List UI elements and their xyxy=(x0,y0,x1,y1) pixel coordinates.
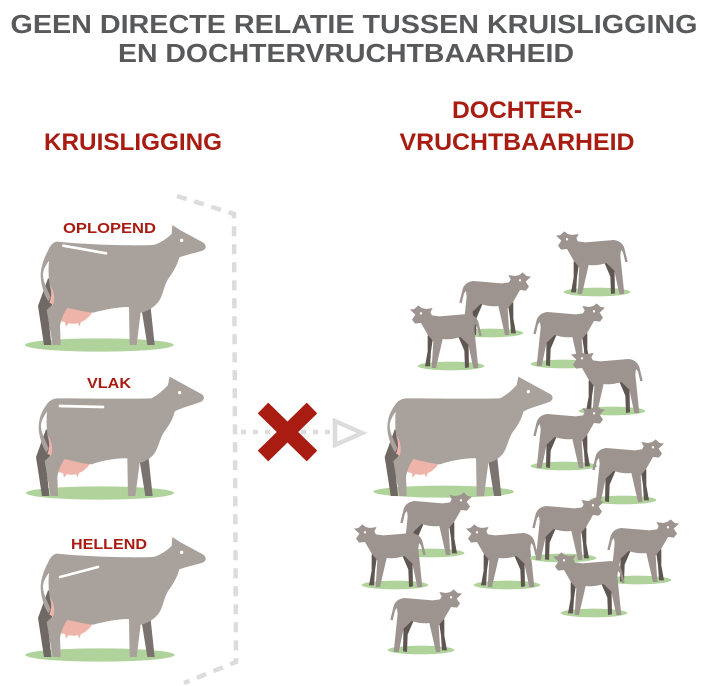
label: hellend: HELLEND xyxy=(71,536,147,553)
cow: vlak xyxy=(26,377,204,500)
calf 1 xyxy=(556,231,630,296)
cow: oplopend xyxy=(25,225,206,352)
mother cow xyxy=(373,377,553,498)
title xyxy=(10,9,697,68)
calf 4 xyxy=(531,303,605,368)
red cross xyxy=(263,408,312,456)
calf 7 xyxy=(590,439,664,504)
dashed bracket xyxy=(177,196,236,683)
calf 11 xyxy=(530,497,604,562)
heading: dochtervruchtbaarheid: VRUCHTBAARHEID xyxy=(400,129,634,156)
label: vlak: VLAK xyxy=(87,375,131,392)
calf 6 xyxy=(531,405,605,470)
calf 14 xyxy=(388,589,462,654)
heading: dochtervruchtbaarheid xyxy=(400,97,634,156)
calf 10 xyxy=(466,524,540,589)
arrow xyxy=(241,421,362,445)
calf 12 xyxy=(605,519,679,584)
calf 3 xyxy=(410,305,484,370)
calf 5 xyxy=(571,350,645,415)
heading: kruisligging: KRUISLIGGING xyxy=(44,129,222,156)
label: oplopend: OPLOPEND xyxy=(63,220,156,237)
calf 13 xyxy=(553,552,627,617)
calf 2 xyxy=(457,272,531,337)
heading: dochtervruchtbaarheid: DOCHTER- xyxy=(452,97,582,124)
title: EN DOCHTERVRUCHTBAARHEID xyxy=(118,38,574,68)
cow: hellend xyxy=(25,537,206,662)
calf 8 xyxy=(398,492,472,557)
calf 9 xyxy=(354,524,428,589)
title: GEEN DIRECTE RELATIE TUSSEN KRUISLIGGING xyxy=(10,9,697,39)
